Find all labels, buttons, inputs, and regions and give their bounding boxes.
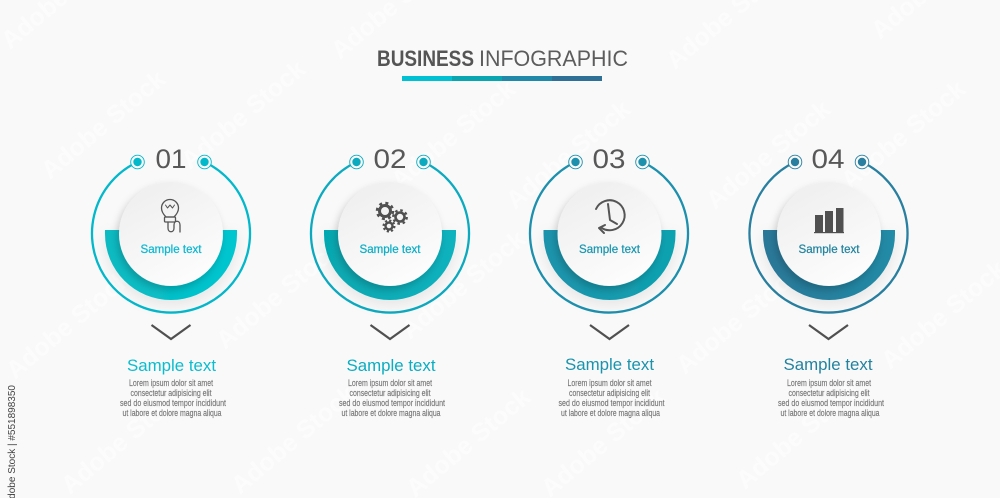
body text: Lorem ipsum dolor sit amet (129, 378, 213, 388)
heading: Sample text (565, 355, 654, 374)
heading: Sample text (346, 356, 436, 375)
title (377, 46, 628, 71)
title underline bar (402, 76, 602, 81)
body text: consectetur adipisicing elit (788, 388, 870, 398)
number 02: 02 (374, 144, 406, 174)
thick arc (544, 230, 676, 300)
body text: sed do eiusmod tempor incididunt (558, 398, 665, 408)
chevron (370, 325, 410, 339)
icon: clock (596, 200, 625, 233)
title: BUSINESS (377, 46, 474, 71)
panel: step 01 (92, 144, 250, 418)
thick arc (324, 230, 456, 300)
watermark pattern: Adobe Stock (701, 95, 836, 215)
panel: step 02 (311, 144, 469, 418)
body text (558, 378, 665, 418)
disc label: Sample text (798, 242, 860, 256)
outer ring with end dots (749, 155, 908, 313)
watermark pattern: Adobe Stock (211, 235, 346, 355)
center disc (338, 182, 442, 286)
body text: sed do eiusmod tempor incididunt (778, 398, 884, 408)
center disc (558, 182, 662, 286)
disc label: Sample text (360, 242, 421, 256)
disc label: Sample text (579, 242, 641, 256)
panel: step 04 (749, 144, 908, 418)
body text: sed do eiusmod tempor incididunt (120, 398, 226, 408)
body text: ut labore et dolore magna aliqua (780, 408, 880, 418)
body text: consectetur adipisicing elit (130, 388, 212, 398)
number 04: 04 (812, 144, 844, 174)
body text: Lorem ipsum dolor sit amet (568, 378, 652, 388)
watermark pattern: Adobe Stock (56, 380, 191, 498)
panel: step 03 (530, 144, 688, 418)
heading: Sample text (127, 356, 216, 375)
watermark pattern: Adobe Stock (176, 55, 311, 175)
outer ring with end dots (92, 155, 250, 313)
outer ring with end dots (311, 155, 469, 313)
center disc (777, 182, 881, 286)
disc label: Sample text (140, 242, 202, 256)
chevron (590, 325, 629, 339)
body text: consectetur adipisicing elit (350, 388, 431, 398)
body text: ut labore et dolore magna aliqua (122, 408, 222, 418)
body text: Lorem ipsum dolor sit amet (348, 378, 432, 388)
body text: ut labore et dolore magna aliqua (342, 408, 441, 418)
watermark pattern: Adobe Stock (1, 265, 136, 385)
body text: sed do eiusmod tempor incididunt (339, 398, 445, 408)
icon: light bulb (162, 200, 180, 232)
thick arc (105, 230, 237, 300)
icon: gears (377, 203, 407, 232)
body text: consectetur adipisicing elit (569, 388, 650, 398)
icon: bar chart (814, 208, 844, 233)
watermark pattern: Adobe Stock (226, 380, 361, 498)
body text (778, 378, 884, 418)
number 01: 01 (156, 144, 186, 174)
heading: Sample text (784, 355, 873, 374)
body text: Lorem ipsum dolor sit amet (787, 378, 871, 388)
thick arc (763, 230, 895, 300)
body text: ut labore et dolore magna aliqua (561, 408, 660, 418)
body text (120, 378, 226, 418)
watermark pattern: Adobe Stock (501, 95, 636, 215)
title: INFOGRAPHIC (479, 46, 628, 71)
body text (339, 378, 445, 418)
number 03: 03 (592, 144, 626, 174)
center disc (119, 182, 223, 286)
chevron (152, 325, 190, 339)
chevron (809, 325, 848, 339)
watermark pattern: Adobe Stock (36, 65, 171, 185)
watermark pattern: Adobe Stock (836, 75, 971, 195)
outer ring with end dots (530, 155, 688, 313)
watermark pattern: Adobe Stock (396, 225, 531, 345)
watermark pattern: Adobe Stock (386, 75, 521, 195)
watermark pattern: Adobe Stock (731, 375, 866, 495)
watermark pattern: Adobe Stock (671, 260, 806, 380)
